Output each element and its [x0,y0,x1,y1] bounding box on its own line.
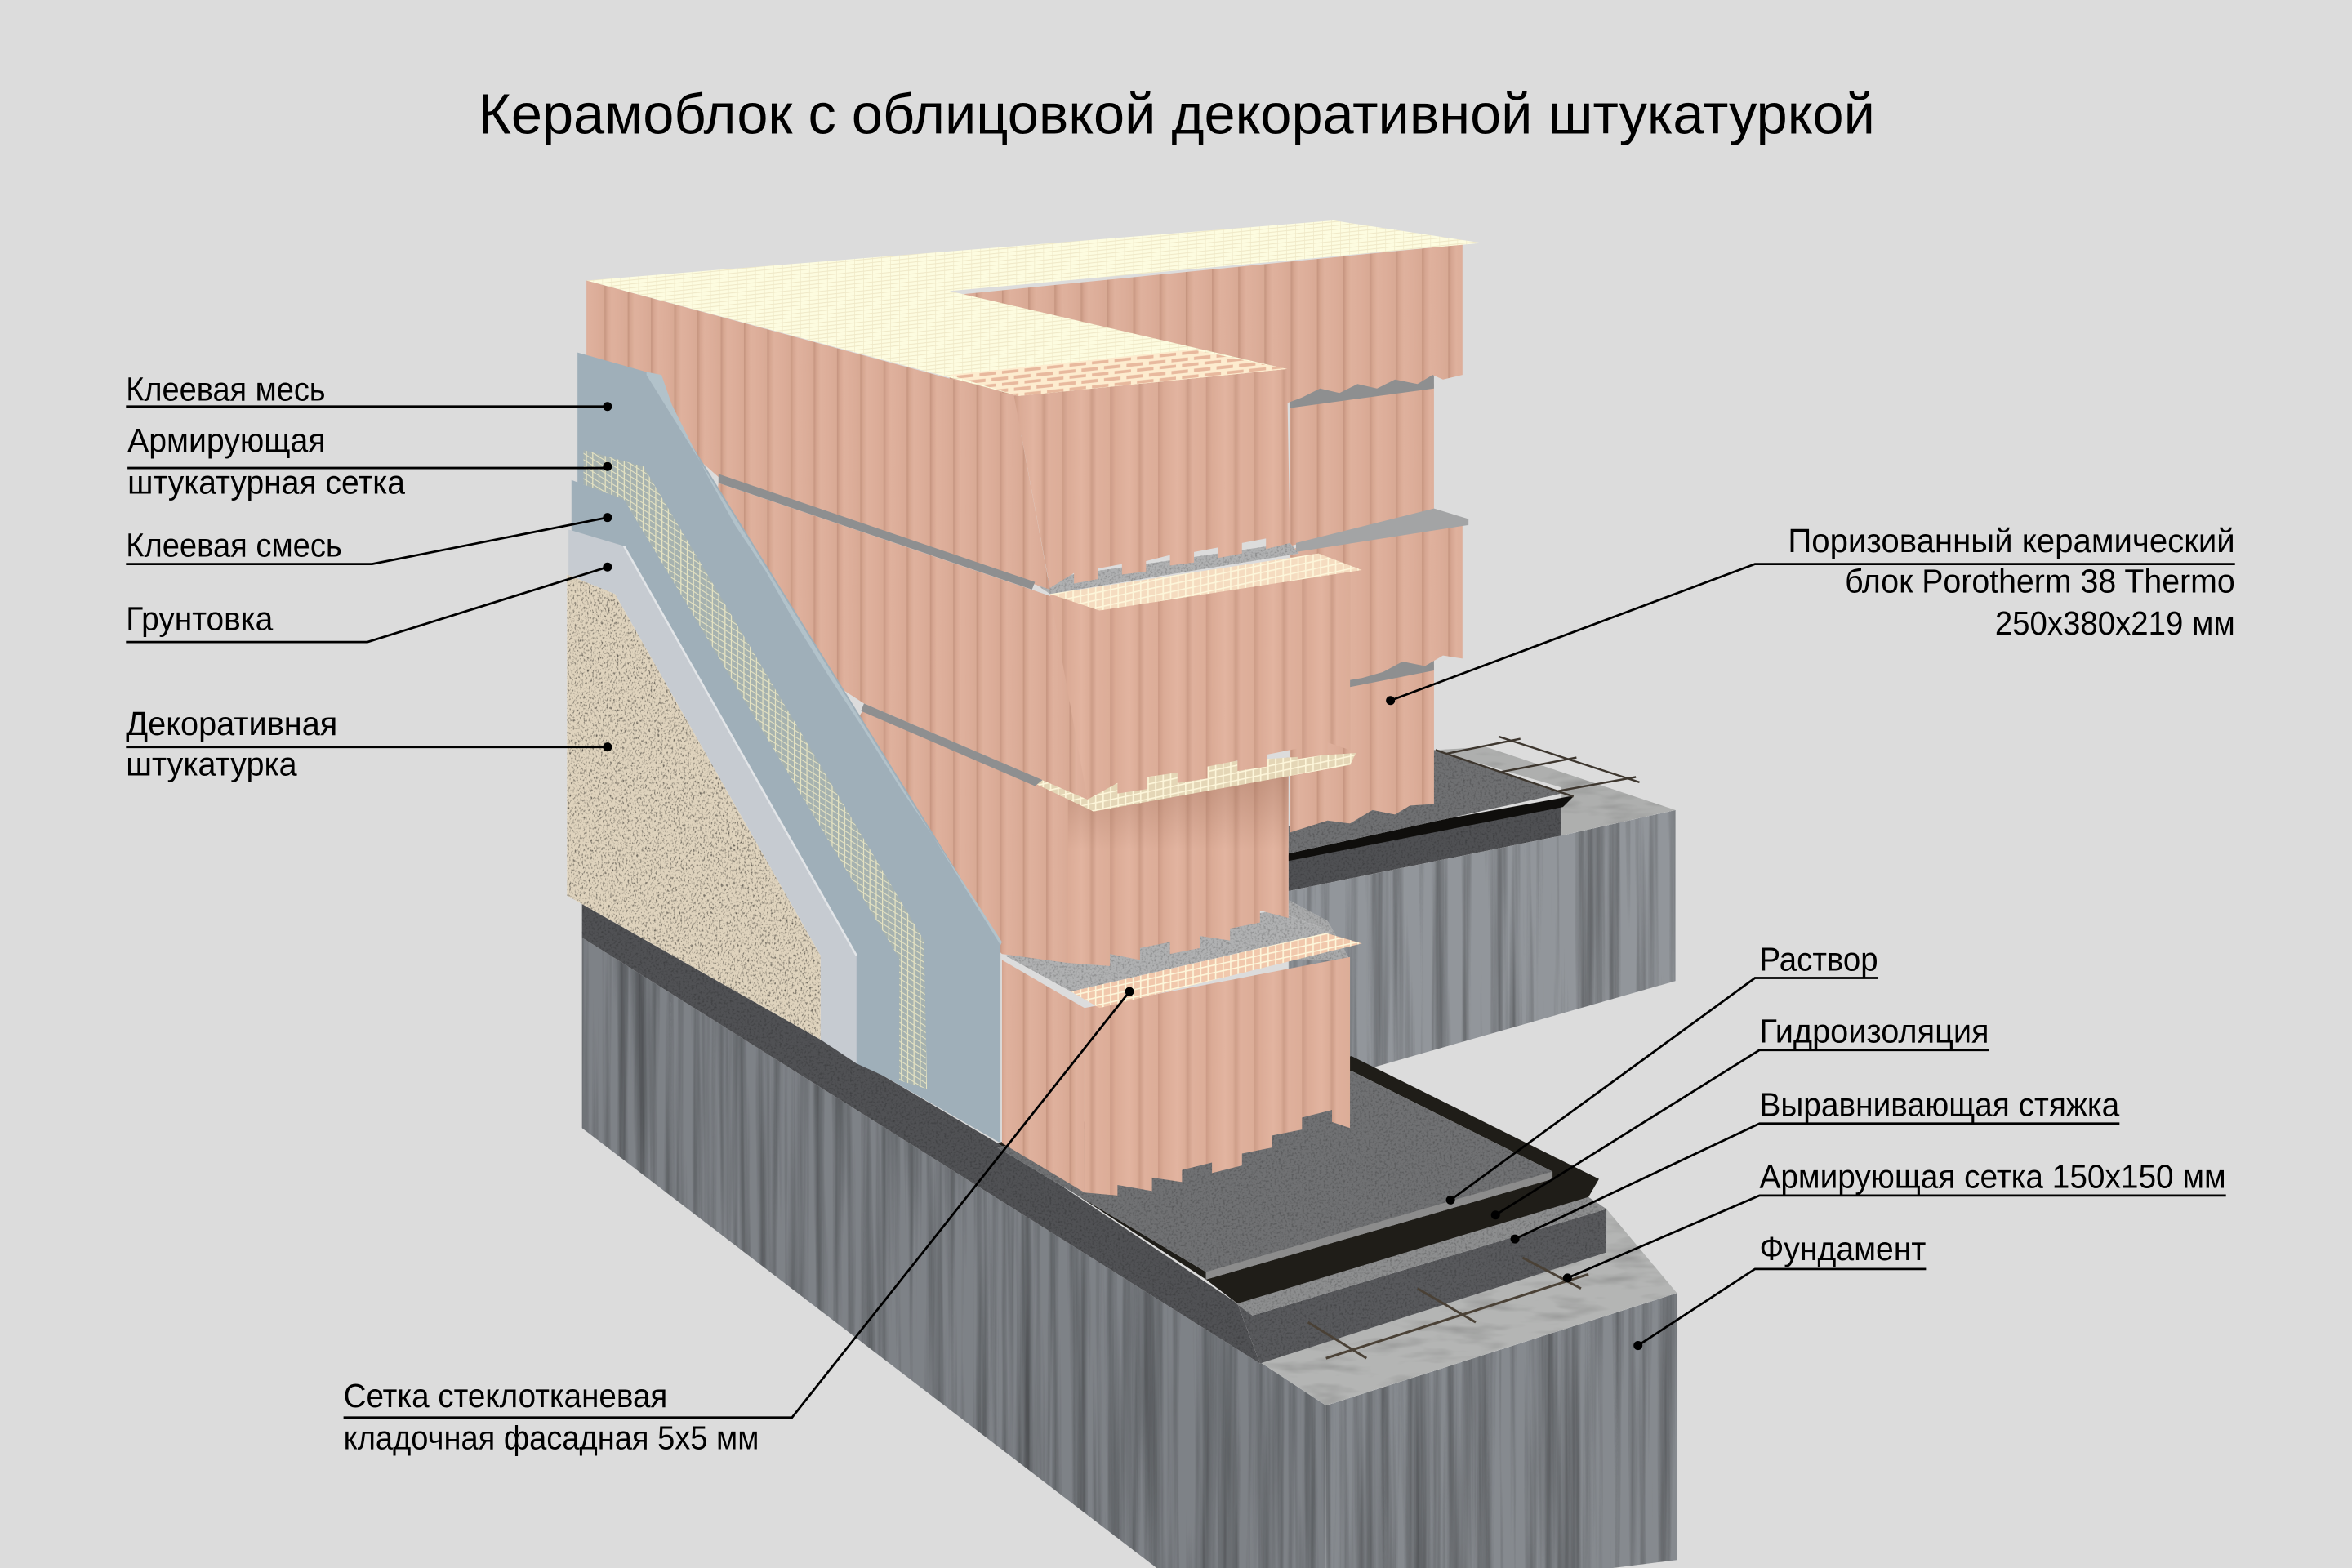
second adhesive layer [572,480,899,1083]
label: adhesive mix [126,370,612,411]
mortar bed under course A [1031,543,1299,594]
label: decorative plaster: Декоративная [126,705,337,742]
mortar bed under course C [1005,911,1332,991]
label: levelling screed [1511,1086,2120,1244]
label: reinforcing plaster mesh: штукатурная сетка [127,463,405,501]
label: glass fibre mesh: кладочная фасадная 5х5 мм [344,1419,759,1456]
label: glass fibre mesh [344,987,1134,1456]
waterproofing [997,1056,1599,1303]
decorative plaster [567,574,821,1040]
label: porous ceramic block [1386,522,2235,705]
reinforcing plaster mesh [583,450,927,1089]
rear foundation block [1289,747,1676,1074]
label: decorative plaster [126,705,612,783]
levelling screed [582,898,1606,1364]
primer layer [568,529,857,1063]
label: mortar [1446,940,1878,1205]
label: mortar: Раствор [1759,940,1878,978]
label: adhesive mixture: Клеевая смесь [126,526,342,564]
label: porous ceramic block: 250х380х219 мм [1995,604,2235,642]
label: glass fibre mesh: Сетка стеклотканевая [344,1377,667,1414]
label: porous ceramic block: блок Porotherm 38 Thermo [1845,563,2235,600]
title: Керамоблок с облицовкой декоративной штукатуркой [479,82,1875,145]
label: primer: Грунтовка [126,599,274,637]
glass fibre masonry mesh upper [1050,554,1362,611]
label: porous ceramic block: Поризованный керамический [1788,522,2235,559]
label: foundation: Фундамент [1759,1230,1926,1267]
glass fibre masonry mesh lower [1071,933,1362,1008]
label: levelling screed: Выравнивающая стяжка [1759,1086,2120,1124]
label: reinforcing plaster mesh: Армирующая [127,421,326,459]
mortar slab [997,1071,1552,1280]
label: reinforcing mesh: Армирующая сетка 150х150 мм [1759,1158,2226,1196]
label: reinforcing plaster mesh [127,421,612,501]
brick course C [825,708,1289,966]
rear reinforcing mesh [1436,737,1640,796]
label: reinforcing mesh [1563,1158,2226,1282]
label: adhesive mixture [126,513,612,564]
top surface of the masonry [586,220,1482,396]
brick course A [586,280,1290,590]
glass fibre masonry mesh middle [1018,753,1356,812]
label: foundation [1633,1230,1926,1350]
foundation [582,932,1677,1568]
label: waterproofing [1491,1013,1989,1219]
label: waterproofing: Гидроизоляция [1759,1013,1989,1050]
front reinforcing mesh [1308,1258,1588,1358]
adhesive mix layer [577,353,1002,1143]
label: decorative plaster: штукатурка [126,746,297,783]
label: primer [126,563,612,642]
label: adhesive mix: Клеевая месь [126,370,326,408]
brick course B [705,483,1350,800]
right wall: masonry courses [950,244,1468,832]
brick course D [1002,957,1350,1196]
